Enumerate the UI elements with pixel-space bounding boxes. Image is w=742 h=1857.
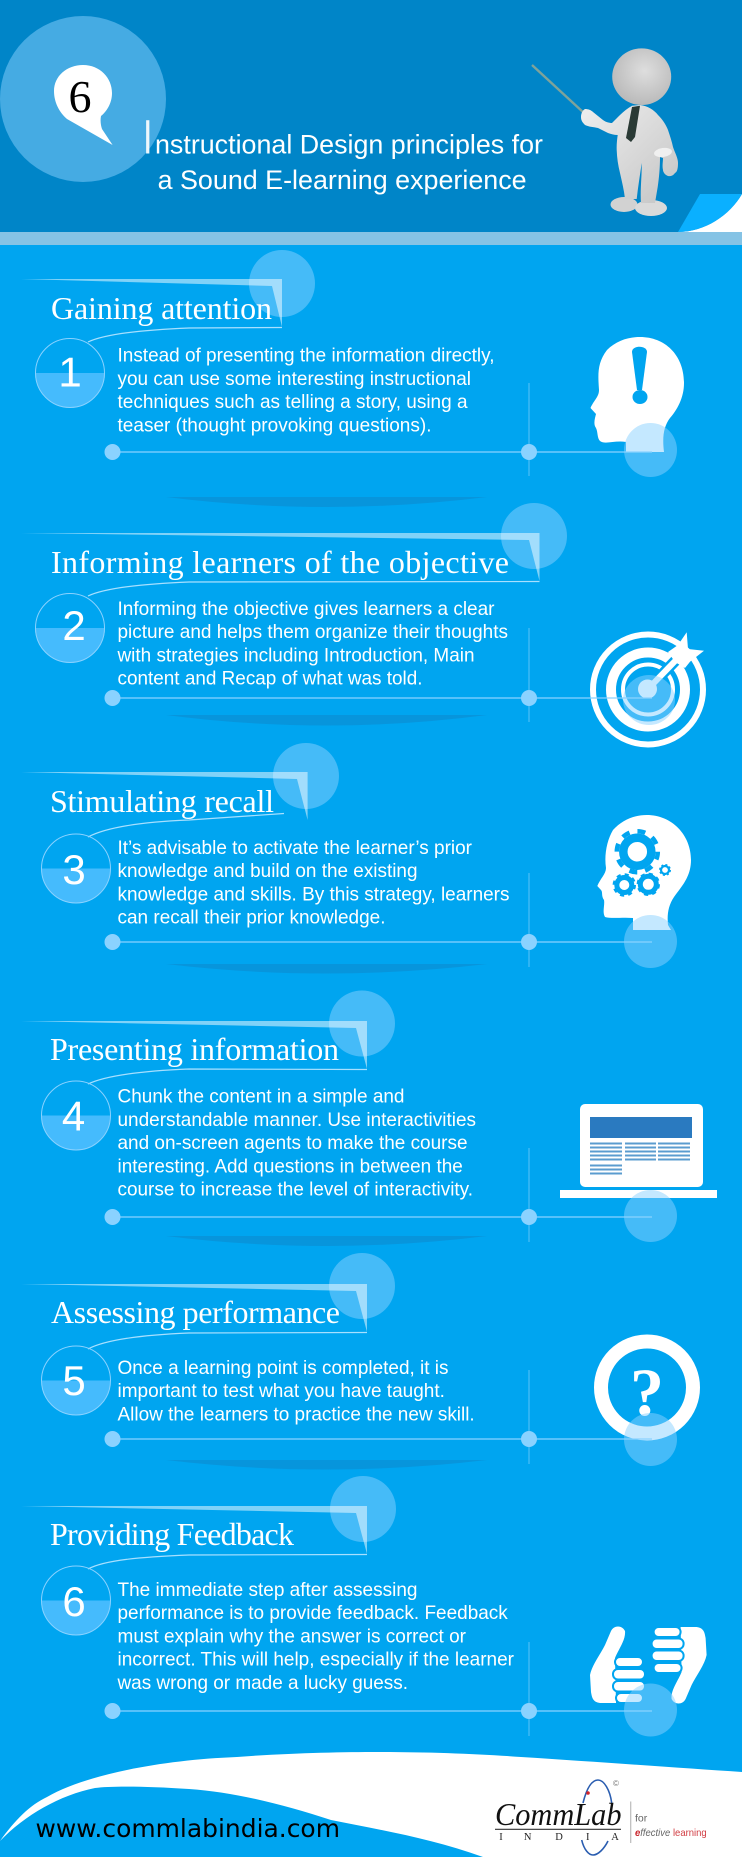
decorative circles xyxy=(249,250,677,477)
body text: important to test what you have taught. xyxy=(118,1381,445,1402)
shadow xyxy=(166,964,487,974)
number badge 2: 2 xyxy=(62,602,86,649)
heading: Stimulating recall xyxy=(50,783,274,819)
body text: must explain why the answer is correct or xyxy=(118,1626,467,1648)
decorative circles xyxy=(330,1476,677,1736)
timeline xyxy=(104,1642,652,1736)
number badge 1: 1 xyxy=(58,349,82,396)
body text: knowledge and build on the existing xyxy=(118,861,418,882)
number badge 3 xyxy=(42,834,110,903)
number badge 1 xyxy=(35,338,105,408)
heading ribbon xyxy=(21,1284,367,1349)
body text: incorrect. This will help, especially if the learner xyxy=(118,1650,515,1671)
body text: It’s advisable to activate the learner’s prior xyxy=(118,838,473,859)
body text: knowledge and skills. By this strategy, learners xyxy=(118,884,510,906)
body text: Informing the objective gives learners a clear xyxy=(118,599,495,620)
icon: speech bubble with 6 xyxy=(54,65,113,145)
panel: section 2 informing learners xyxy=(21,503,704,744)
body text: can recall their prior knowledge. xyxy=(118,908,386,929)
heading: Presenting information xyxy=(50,1031,339,1067)
icon: question mark ring xyxy=(601,1342,693,1434)
body text: you can use some interesting instructional xyxy=(118,369,471,390)
panel: section 3 stimulating recall xyxy=(21,743,691,974)
title: I xyxy=(143,111,152,164)
icon: head with exclamation mark xyxy=(590,337,684,452)
heading ribbon xyxy=(21,279,282,342)
logo: CommLab India: CommLab xyxy=(495,1796,622,1832)
title: nstructional Design principles for xyxy=(155,129,543,159)
big light circle xyxy=(0,16,166,182)
body text xyxy=(118,1087,476,1201)
number badge 4 xyxy=(42,1081,110,1150)
body text: interesting. Add questions in between the xyxy=(118,1156,463,1178)
body text: understandable manner. Use interactivities xyxy=(118,1110,476,1131)
icon: page corner fold xyxy=(678,194,742,232)
timeline xyxy=(104,1148,652,1242)
footer xyxy=(0,1752,742,1857)
decorative circles xyxy=(273,743,677,968)
decorative circles xyxy=(329,1253,677,1466)
body text: and on-screen agents to make the course xyxy=(118,1133,468,1154)
body text: was wrong or made a lucky guess. xyxy=(117,1673,408,1694)
body text xyxy=(118,838,510,929)
icon: speech bubble with 6: 6 xyxy=(68,71,92,122)
icon: head with gears xyxy=(597,815,691,930)
heading ribbon xyxy=(21,1021,367,1084)
body text xyxy=(117,599,508,690)
shadow xyxy=(166,1236,487,1246)
body text: The immediate step after assessing xyxy=(118,1580,418,1601)
body text: Once a learning point is completed, it is xyxy=(118,1358,448,1379)
shadow xyxy=(166,497,487,507)
number badge 2 xyxy=(35,594,105,662)
panel: section 6 providing feedback xyxy=(21,1476,707,1736)
heading: Gaining attention xyxy=(51,290,272,326)
panel: section 1 gaining attention xyxy=(21,250,684,507)
white swoosh xyxy=(0,1752,742,1857)
body text: teaser (thought provoking questions). xyxy=(118,416,432,436)
number badge 4: 4 xyxy=(62,1093,85,1140)
body text xyxy=(117,1580,515,1694)
icon: thumbs up and thumbs down xyxy=(590,1626,707,1704)
body text: with strategies including Introduction, Main xyxy=(117,646,474,666)
decorative circles xyxy=(501,503,675,725)
logo: CommLab India: effective learning xyxy=(635,1827,707,1839)
shadow xyxy=(166,715,487,726)
number badge 5 xyxy=(42,1346,110,1415)
body text: Instead of presenting the information directly, xyxy=(118,346,494,367)
heading: Informing learners of the objective xyxy=(51,544,509,580)
heading ribbon xyxy=(21,533,540,596)
body text: picture and helps them organize their thoughts xyxy=(118,622,508,643)
body text: course to increase the level of interactivity. xyxy=(118,1180,473,1201)
heading ribbon xyxy=(21,772,308,837)
header banner xyxy=(0,0,742,245)
heading ribbon xyxy=(21,1506,367,1569)
body text: performance is to provide feedback. Feedback xyxy=(118,1603,508,1624)
logo: CommLab India: for xyxy=(635,1813,648,1825)
website url: www.commlabindia.com xyxy=(36,1814,340,1843)
logo: CommLab India xyxy=(495,1779,707,1855)
panel: section 4 presenting information xyxy=(21,990,717,1246)
logo: CommLab India: INDIA xyxy=(499,1832,619,1843)
timeline xyxy=(104,628,652,722)
number badge 5: 5 xyxy=(62,1357,86,1404)
shadow xyxy=(166,1460,487,1470)
title: a Sound E-learning experience xyxy=(158,165,527,195)
number badge 6 xyxy=(42,1566,110,1635)
body text: techniques such as telling a story, using a xyxy=(118,392,468,413)
body text xyxy=(118,1358,475,1426)
heading: Providing Feedback xyxy=(50,1516,294,1552)
timeline xyxy=(104,873,652,967)
timeline xyxy=(104,383,652,476)
timeline xyxy=(104,1370,652,1464)
panel: section 5 assessing performance xyxy=(21,1253,693,1470)
title xyxy=(143,111,543,195)
body text: Allow the learners to practice the new skill. xyxy=(118,1404,475,1426)
body text: content and Recap of what was told. xyxy=(118,669,422,690)
decorative circles xyxy=(329,990,677,1242)
icon: laptop screen xyxy=(560,1104,717,1198)
number badge 6: 6 xyxy=(62,1578,86,1625)
heading: Assessing performance xyxy=(51,1294,340,1330)
icon: question mark ring: ? xyxy=(630,1354,664,1430)
logo: CommLab India: © xyxy=(613,1779,619,1788)
number badge 3: 3 xyxy=(62,846,86,893)
icon: target with arrow xyxy=(593,632,704,744)
icon: presenter figure with pointer xyxy=(532,48,678,216)
body text: Chunk the content in a simple and xyxy=(118,1087,404,1108)
body text xyxy=(118,346,494,436)
